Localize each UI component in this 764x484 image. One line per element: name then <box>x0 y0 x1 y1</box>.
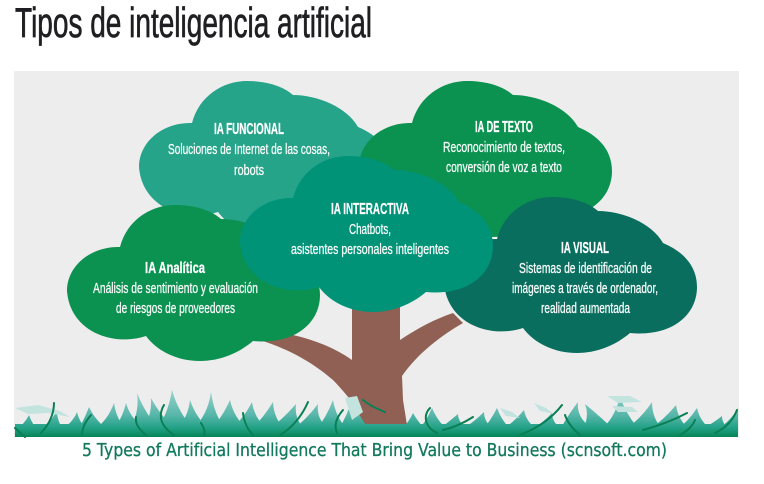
panel: tree illustration <box>14 71 739 437</box>
text: IA de texto: IA DE TEXTO <box>475 119 533 136</box>
text: IA de texto: Reconocimiento de textos, <box>443 140 565 156</box>
cloud: IA visual <box>444 197 697 353</box>
text: IA funcional: Soluciones de Internet de las cosas, <box>168 142 330 158</box>
text: IA interactiva <box>291 201 449 258</box>
cloud: IA analítica <box>67 205 320 361</box>
cloud: IA de texto <box>359 81 612 237</box>
text: IA visual: realidad aumentada <box>541 301 631 317</box>
text: IA analítica <box>93 260 258 317</box>
text: IA funcional: robots <box>234 163 264 179</box>
text: IA visual: imágenes a través de ordenador, <box>512 281 658 297</box>
text: IA visual <box>512 240 658 317</box>
text: IA visual: Sistemas de identificación de <box>519 261 652 277</box>
text: IA interactiva: Chatbots, <box>349 222 391 238</box>
cloud: IA funcional <box>139 81 392 237</box>
text: IA analítica: Análisis de sentimiento y evaluación <box>93 281 258 297</box>
text: IA interactiva: asistentes personales inteligentes <box>291 242 449 258</box>
text: IA visual: IA VISUAL <box>561 240 609 257</box>
cloud: IA interactiva <box>240 156 493 312</box>
text: IA de texto: conversión de voz a texto <box>446 160 562 176</box>
grass <box>15 390 738 437</box>
text: IA de texto <box>443 119 565 176</box>
text: IA analítica: de riesgos de proveedores <box>116 301 235 317</box>
title: Tipos de inteligencia artificial <box>15 0 372 46</box>
tree trunk and branches <box>263 300 463 425</box>
small highlight marks between clouds <box>217 209 498 240</box>
text: IA funcional <box>168 121 330 179</box>
text: IA interactiva: IA INTERACTIVA <box>331 201 409 218</box>
caption link: 5 Types of Artificial Intelligence That Bring Value to Business (scnsoft.com) <box>82 441 667 461</box>
text: IA analítica: IA Analítica <box>145 260 205 277</box>
text: IA funcional: IA FUNCIONAL <box>214 121 284 138</box>
